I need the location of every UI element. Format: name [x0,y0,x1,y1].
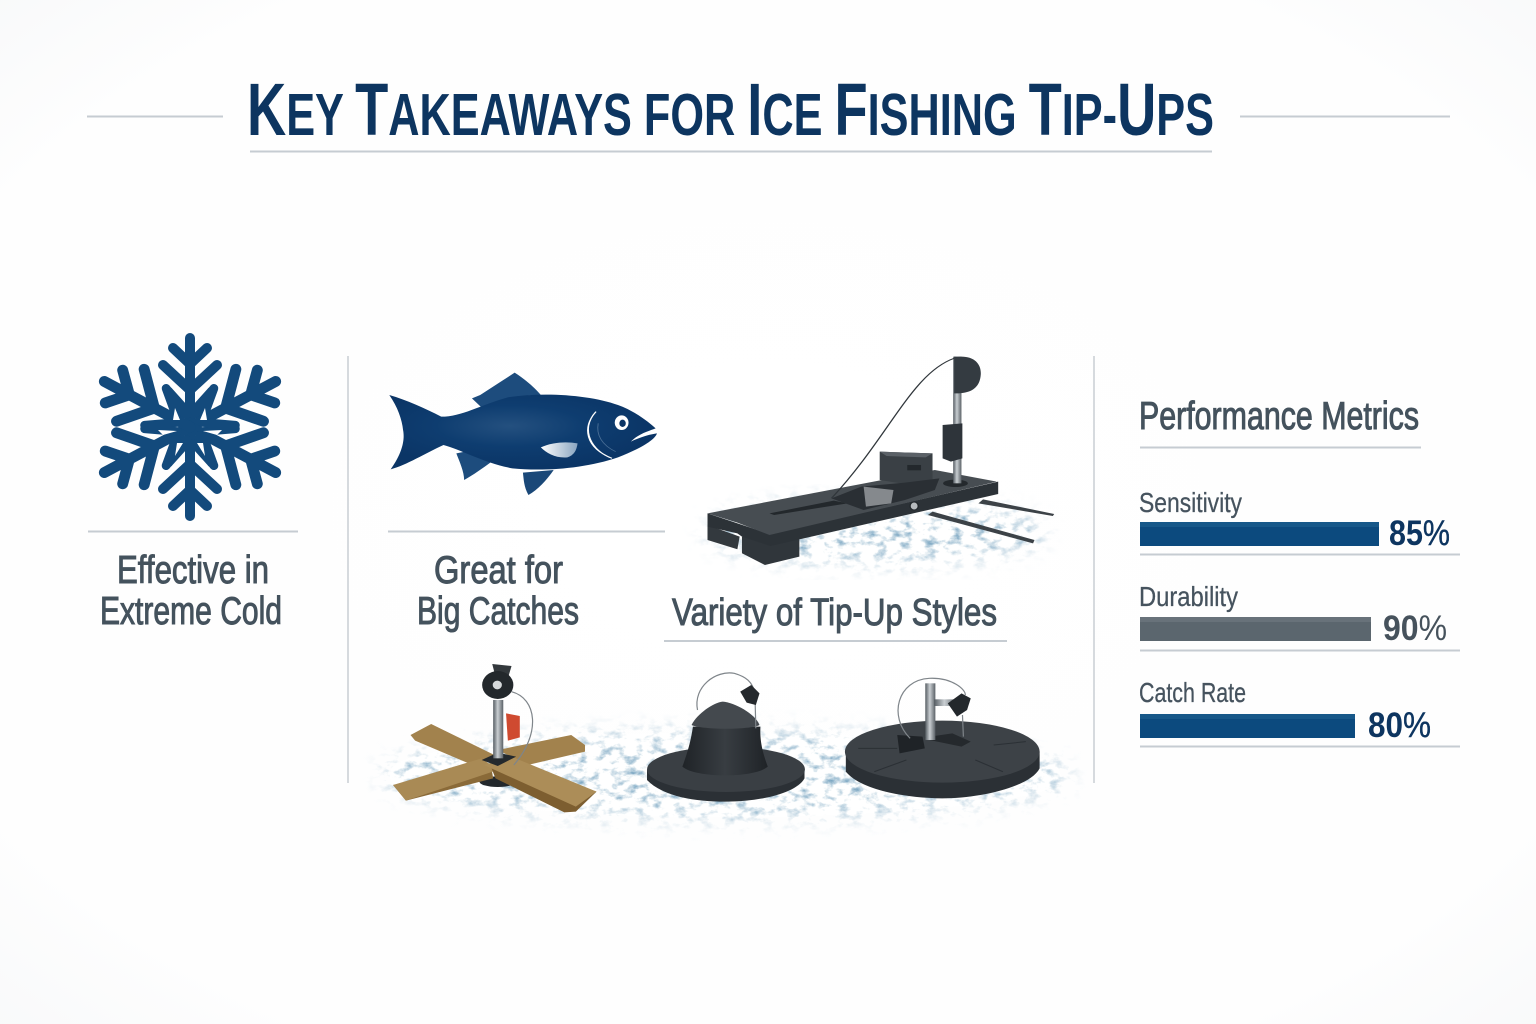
label: great for big catches: Big Catches [417,590,579,633]
snow: upper mound [705,502,1045,562]
metric: durability 90%: Durability [1139,581,1238,612]
metric: catch rate 80%: 80% [1368,706,1431,745]
metric: durability 90%: 90% [1383,609,1447,648]
icon: snowflake [91,338,289,516]
title: KEY TAKEAWAYS FOR ICE FISHING TIP-UPS [247,68,1214,151]
label: great for big catches: Great for [434,549,563,592]
label: effective in extreme cold [100,549,282,633]
illustration: dome tip-up [647,673,805,802]
label: great for big catches [417,549,579,633]
metric: sensitivity 85%: Sensitivity [1139,487,1242,518]
metric: durability 90% [1139,581,1460,650]
label: effective in extreme cold: Effective in [117,549,269,592]
illustration: round disc tip-up [845,678,1040,798]
metric: sensitivity 85% [1139,487,1460,554]
heading: variety of tip-up styles: Variety of Tip-Up Styles [672,592,997,634]
heading: performance metrics: Performance Metrics [1139,395,1419,438]
metric: catch rate 80%: Catch Rate [1139,677,1246,708]
illustration: wooden cross tip-up [393,664,596,812]
metric: catch rate 80% [1139,677,1460,746]
icon: fish [389,373,657,495]
metric: sensitivity 85%: 85% [1389,514,1450,553]
illustration: platform tip-up [708,357,1054,565]
label: effective in extreme cold: Extreme Cold [100,590,282,633]
snow: lower field [380,733,1070,817]
